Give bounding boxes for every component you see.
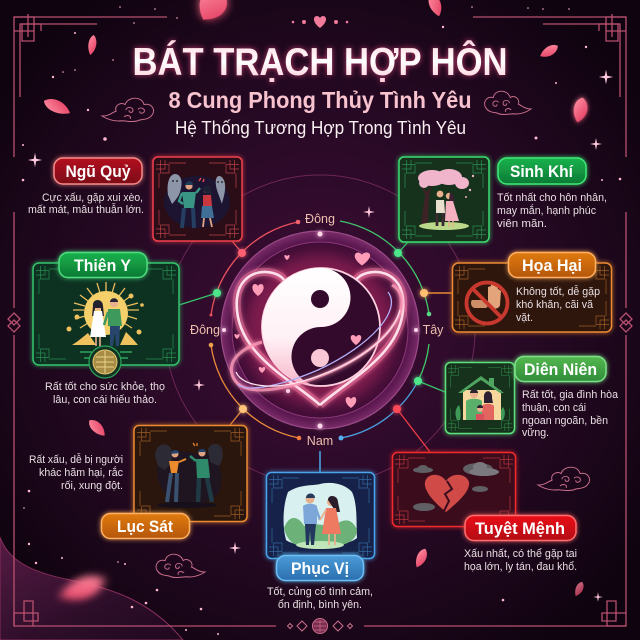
illustration: quarrel with ghosts <box>164 174 230 228</box>
faint outer ring <box>165 175 475 485</box>
tagline: Hệ Thống Tương Hợp Trong Tình Yêu <box>175 118 466 138</box>
subtitle: 8 Cung Phong Thủy Tình Yêu <box>168 87 472 113</box>
panel: Phục Vị <box>266 472 374 611</box>
description <box>464 548 577 573</box>
panel: Tuyệt Mệnh <box>392 452 577 573</box>
direction label: Đông left: Đông <box>190 323 220 337</box>
description: họa lớn, ly tán, đau khổ. <box>464 561 577 573</box>
yin-yang <box>262 268 380 386</box>
card frame <box>33 263 179 365</box>
icon: prohibited hands <box>466 282 508 324</box>
pill <box>465 516 576 540</box>
illustration: family house <box>456 376 505 420</box>
compass arcs and connectors <box>179 221 452 472</box>
panel: Thiên Y <box>33 252 179 406</box>
illustration: sunburst couple <box>66 282 144 346</box>
description: viên mãn. <box>497 218 547 230</box>
pill: Họa Hại <box>522 256 582 275</box>
card frame <box>266 472 374 558</box>
title: BÁT TRẠCH HỢP HÔN <box>132 39 508 84</box>
description: Rất tốt cho sức khỏe, thọ <box>45 381 165 393</box>
direction label: Nam: Nam <box>307 434 333 448</box>
card frame <box>134 426 247 522</box>
pill <box>59 252 147 278</box>
sparkle stars <box>28 70 613 602</box>
medallion <box>80 346 132 378</box>
description: rối, xung đột. <box>61 480 123 492</box>
illustration: couple in nature <box>284 483 357 549</box>
description: Tốt, củng cố tình cảm, <box>267 586 373 598</box>
bottom medallion ornament <box>288 618 352 634</box>
description: khó khăn, cãi vã <box>516 299 594 311</box>
clouds <box>102 91 590 578</box>
panel: Lục Sát <box>29 426 247 538</box>
illustration: broken heart and clouds <box>413 462 499 512</box>
compass nodes <box>209 220 431 440</box>
pill: Sinh Khí <box>510 162 574 181</box>
disc <box>221 231 419 429</box>
description: Tốt nhất cho hôn nhân, <box>497 192 607 204</box>
description: Cực xấu, gặp xui xèo, <box>42 192 143 204</box>
pill <box>54 158 142 184</box>
description: may mắn, hạnh phúc <box>497 204 596 217</box>
illustration: arguing couple <box>155 443 223 508</box>
description <box>45 381 165 406</box>
description: mất mát, mâu thuẫn lớn. <box>28 203 144 216</box>
glow points <box>222 232 418 428</box>
direction label: Tây: Tây <box>423 323 444 337</box>
panel: Sinh Khí <box>399 157 607 242</box>
description: Rất xấu, dễ bị người <box>29 453 123 466</box>
description <box>28 192 144 216</box>
description: Xấu nhất, có thể gặp tai <box>464 548 577 560</box>
illustration: blossom tree couple <box>418 169 474 230</box>
pill: Ngũ Quỷ <box>66 162 131 181</box>
card frame <box>446 362 514 434</box>
description <box>516 285 600 324</box>
orbits <box>231 285 402 390</box>
description: thuận, con cái <box>522 402 586 414</box>
pill: Thiên Y <box>74 256 132 275</box>
card frame <box>153 157 242 241</box>
pill: Lục Sát <box>117 517 173 536</box>
description <box>267 586 373 611</box>
card frame <box>399 157 489 242</box>
pill <box>508 252 596 278</box>
direction label: Đông top: Đông <box>305 212 335 226</box>
description: ngoan ngoãn, bền <box>522 415 608 427</box>
decorative wave bottom-left <box>0 537 183 640</box>
description <box>522 389 619 439</box>
heart outline <box>237 272 403 405</box>
top heart ornament <box>292 16 348 28</box>
description: ổn định, bình yên. <box>278 599 362 611</box>
panel: Ngũ Quỷ <box>28 157 242 241</box>
pill <box>102 514 190 538</box>
description: khác hãm hại, rắc <box>39 466 123 479</box>
pill: Tuyệt Mệnh <box>475 519 565 538</box>
description <box>497 192 607 230</box>
description: vặt. <box>516 312 533 324</box>
description <box>29 453 123 492</box>
pill <box>515 356 606 382</box>
panel: Họa Hại <box>452 252 612 332</box>
pill: Diên Niên <box>524 360 597 379</box>
description: Không tốt, dễ gặp <box>516 285 600 298</box>
description: lâu, con cái hiếu thảo. <box>53 394 157 406</box>
pill: Phục Vị <box>291 559 349 578</box>
card frame <box>392 452 516 526</box>
description: Rất tốt, gia đình hòa <box>522 389 619 401</box>
small hearts <box>234 252 370 408</box>
description: vững. <box>522 427 549 439</box>
panel: Diên Niên <box>446 356 619 439</box>
card frame <box>452 263 612 332</box>
pill <box>498 158 586 184</box>
center emblem: yin-yang heart <box>221 231 419 429</box>
